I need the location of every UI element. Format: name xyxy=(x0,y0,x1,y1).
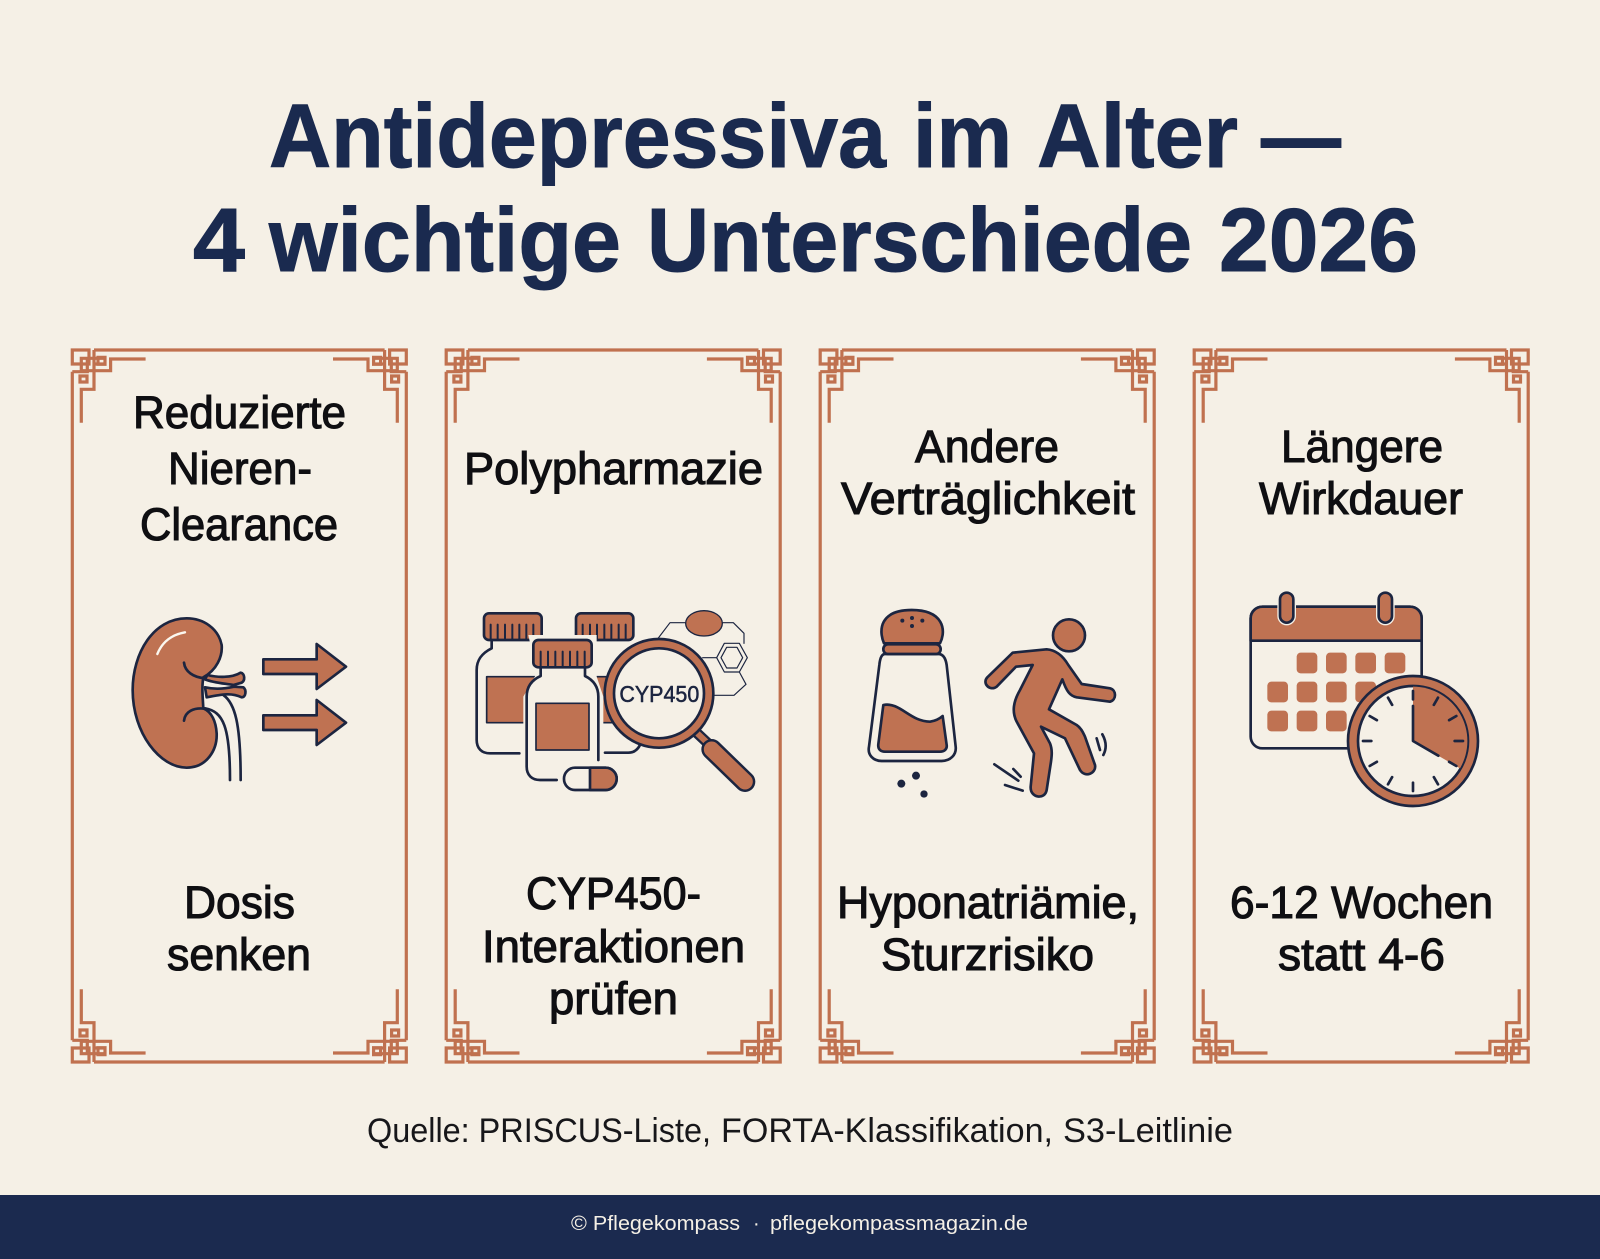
magnifier lens xyxy=(605,639,713,748)
footer: © Pflegekompass xyxy=(571,1213,740,1235)
caption: senken xyxy=(167,929,311,980)
heading: Nieren- xyxy=(168,443,312,494)
panel: Reduzierte Nieren-Clearance xyxy=(72,350,406,1062)
panel: Polypharmazie xyxy=(446,350,780,1062)
icon: pill bottles and magnifier xyxy=(477,611,747,790)
heading xyxy=(1259,421,1463,524)
panel frame xyxy=(446,350,780,1062)
panel frame xyxy=(72,350,406,1062)
title: 2026 xyxy=(1219,191,1418,291)
caption: CYP450- xyxy=(526,868,701,919)
source line: Quelle: PRISCUS-Liste, xyxy=(367,1112,711,1150)
heading: Wirkdauer xyxy=(1259,473,1463,524)
shaker xyxy=(881,610,943,643)
heading: Längere xyxy=(1281,421,1443,472)
footer xyxy=(0,1195,1600,1259)
heading xyxy=(133,387,346,550)
caption: Interaktionen xyxy=(482,921,745,972)
back bottle left xyxy=(477,641,519,753)
caption: statt 4-6 xyxy=(1278,929,1445,980)
title: — xyxy=(1261,87,1341,187)
caption: 6-12 Wochen xyxy=(1230,877,1493,928)
heading: Clearance xyxy=(140,499,338,550)
heading: Reduzierte xyxy=(133,387,346,438)
source line xyxy=(367,1112,1233,1150)
panel: Längere Wirkdauer xyxy=(1194,350,1528,1062)
title: im xyxy=(913,87,1012,187)
heading: Andere xyxy=(915,421,1059,472)
caption xyxy=(167,877,311,980)
panel frame xyxy=(1194,350,1528,1062)
title: Unterschiede xyxy=(647,191,1192,291)
title: Antidepressiva xyxy=(269,87,887,187)
caption xyxy=(837,877,1139,980)
footer: · xyxy=(753,1213,760,1235)
caption: prüfen xyxy=(549,973,678,1024)
heading: Verträglichkeit xyxy=(841,473,1136,524)
molecule xyxy=(657,623,747,695)
caption xyxy=(482,868,745,1024)
title xyxy=(193,87,1418,291)
caption: Sturzrisiko xyxy=(881,929,1094,980)
caption: Dosis xyxy=(184,877,295,928)
footer: pflegekompassmagazin.de xyxy=(770,1213,1028,1235)
source line: FORTA-Klassifikation, xyxy=(721,1112,1053,1150)
heading xyxy=(841,421,1136,524)
panel: Andere Verträglichkeit xyxy=(820,350,1154,1062)
front bottle xyxy=(523,635,603,785)
caption xyxy=(1230,877,1493,980)
caption: Hyponatriämie, xyxy=(837,877,1139,928)
back bottle right xyxy=(605,745,640,753)
icon: kidney with arrows xyxy=(133,618,346,780)
clock xyxy=(1348,676,1478,806)
capsule xyxy=(564,768,617,790)
source line: S3-Leitlinie xyxy=(1063,1112,1233,1150)
title: Alter xyxy=(1037,87,1238,187)
person xyxy=(1053,619,1085,651)
panel frame xyxy=(820,350,1154,1062)
icon: salt shaker and falling person xyxy=(869,610,1115,798)
magnifier handle xyxy=(697,733,709,745)
heading: Polypharmazie xyxy=(464,443,763,494)
icon: calendar and clock xyxy=(1251,593,1478,806)
title: wichtige xyxy=(268,191,621,291)
title: 4 xyxy=(193,191,245,291)
icon: pill bottles and magnifier: CYP450 xyxy=(619,681,699,707)
